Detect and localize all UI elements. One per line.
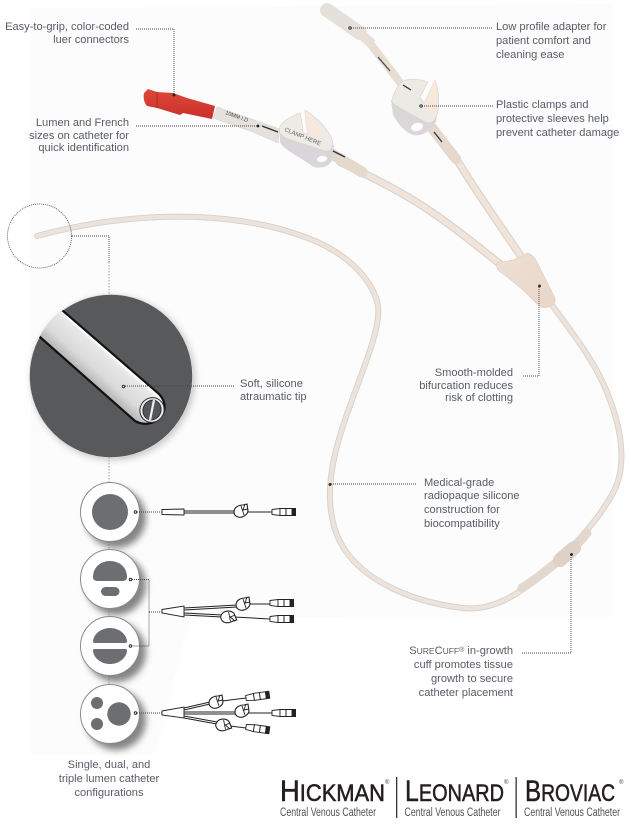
callout: surecuff: in-growth [464,645,513,657]
callout: lumen and french sizes: quick identification [38,142,129,154]
tip magnifier ring [8,204,72,268]
enlarged tip: soft silicone atraumatic tip [30,294,195,460]
callout: plastic clamps: protective sleeves help [496,113,609,125]
left clamp [279,110,345,168]
callout: low profile adapter: Low profile adapter for [496,21,607,33]
main catheter tube [37,217,621,608]
catheter photograph [37,10,621,608]
callout: luer connectors: Easy-to-grip, color-coded [5,21,129,33]
red luer connector [144,89,280,143]
callout: surecuff: ® [459,646,465,654]
callout: surecuff: cuff promotes tissue [414,659,513,671]
callout: plastic clamps: prevent catheter damage [496,127,619,139]
callout: surecuff: SURECUFF [409,645,459,657]
callout: medical-grade silicone: construction for [424,504,500,516]
tube [32,304,165,424]
callout: surecuff: catheter placement [419,687,513,699]
callout: medical-grade silicone: biocompatibility [424,518,500,530]
bifurcation [497,253,555,308]
suture cuff [522,533,587,588]
callout: smooth-molded bifurcation: risk of clotting [445,392,513,404]
dual lumen catheter drawing [162,597,294,627]
triple lumen circle [80,684,146,750]
callout: lumen and french sizes: Lumen and French [36,117,129,129]
low profile adapter [327,10,404,88]
lumen face [135,393,169,427]
callout: medical-grade silicone: Medical-grade [424,477,494,489]
callout: luer connectors: luer connectors [53,34,129,46]
callout: plastic clamps: Plastic clamps and [496,99,588,111]
cross section leaders [137,511,162,513]
left clamp: CLAMP HERE [283,127,322,147]
logo: Leonard: LEONARD [405,775,504,808]
callout: low profile adapter: cleaning ease [496,49,564,61]
logo: Broviac [516,775,624,819]
dual lumen circle B [80,616,146,682]
single lumen circle [80,482,146,548]
circle shadow [31,296,195,460]
callout: soft silicone tip: atraumatic tip [240,391,307,403]
callout: lumen configurations: Single, dual, and [68,759,150,771]
single lumen catheter drawing [162,504,296,517]
callout: smooth-molded bifurcation: Smooth-molded [435,367,513,379]
dual lumen circle A [80,550,146,615]
dark circle [30,294,192,458]
callout: medical-grade silicone: radiopaque silicone [424,490,520,502]
callout: smooth-molded bifurcation: bifurcation reduces [419,380,513,392]
logo: Hickman: ® [385,779,390,786]
logo: Hickman: Central Venous Catheter [280,807,376,819]
logo: Broviac: BROVIAC [525,775,615,808]
right clamp [391,79,442,142]
callout: soft silicone tip: Soft, silicone [240,378,303,390]
triple lumen catheter drawing [162,691,296,735]
logo: Leonard: ® [504,779,509,786]
logo: Broviac: ® [619,779,624,786]
red luer connector: 10MM I.D [224,110,249,124]
lumen cross sections [80,457,146,750]
callout: surecuff: growth to secure [431,673,513,685]
logo: Leonard [396,775,509,819]
callout: lumen configurations: triple lumen catheter [59,773,160,785]
connecting line [108,457,110,685]
leader lines [8,27,573,714]
logo: Leonard: Central Venous Catheter [404,807,501,819]
logo: Hickman: HICKMAN [280,775,385,808]
callout: lumen and french sizes: sizes on catheter for [29,130,129,142]
callout: low profile adapter: patient comfort and [496,35,591,47]
callout: lumen configurations: configurations [74,787,144,799]
extension legs [330,128,522,268]
